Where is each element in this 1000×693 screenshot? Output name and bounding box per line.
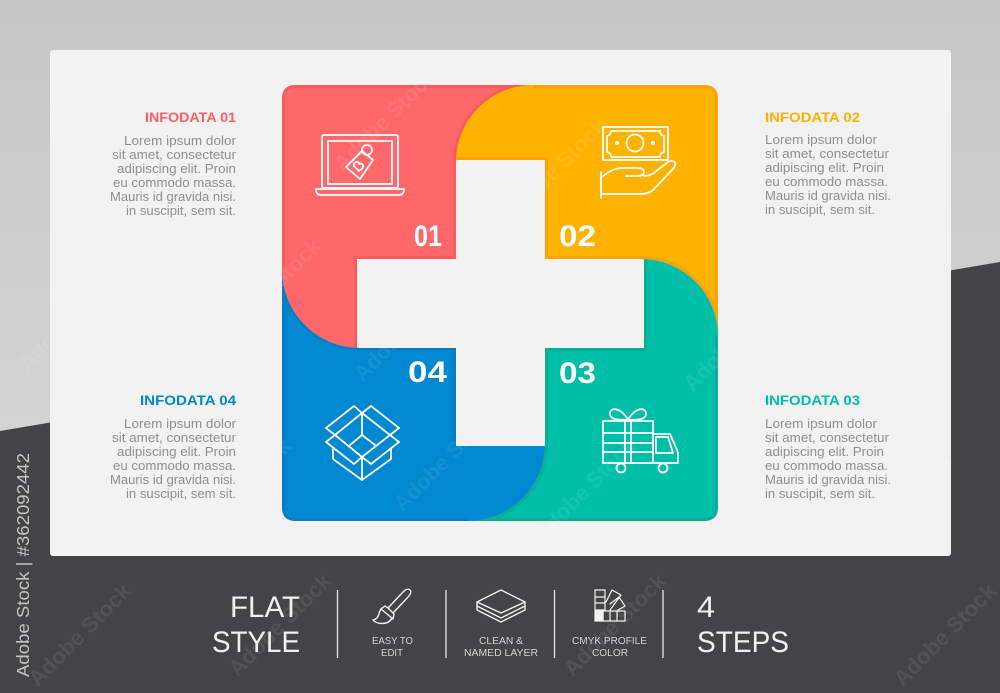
body 02: in suscipit, sem sit.	[765, 203, 875, 217]
icon: stacked layers	[477, 590, 525, 622]
faint diagonal stock marks: Adobe Stock	[13, 263, 127, 376]
faint diagonal stock marks: Adobe Stock	[388, 403, 502, 516]
body 04: adipiscing elit. Proin	[117, 445, 236, 459]
caption: clean and named layer: CLEAN &	[479, 636, 523, 647]
segment 03 teal	[468, 259, 718, 521]
vertical stock credit: Adobe Stock | #362092442	[13, 453, 33, 677]
body 03: sit amet, consectetur	[765, 431, 889, 445]
caption: cmyk profile color	[572, 636, 647, 659]
body 04: Lorem ipsum dolor	[124, 417, 236, 431]
body 01	[110, 134, 236, 218]
center plus shape	[357, 160, 644, 446]
caption: easy to edit: EDIT	[381, 648, 403, 659]
caption: easy to edit: EASY TO	[372, 636, 413, 647]
footer title: 4 steps: 4	[697, 591, 715, 624]
heading 04: INFODATA 04	[140, 392, 236, 408]
body 03: Lorem ipsum dolor	[765, 417, 877, 431]
number 01: 01	[414, 220, 442, 253]
body 03: eu commodo massa.	[765, 459, 888, 473]
body 01: adipiscing elit. Proin	[117, 162, 236, 176]
icon: delivery truck with gift	[603, 409, 678, 472]
text block: infodata 02	[765, 109, 891, 217]
icon: laptop with price tag	[316, 135, 404, 195]
faint diagonal stock marks: Adobe Stock	[328, 63, 442, 176]
body 03: Mauris id gravida nisi.	[765, 473, 891, 487]
footer strip	[212, 589, 789, 659]
body 02	[765, 133, 891, 217]
body 04	[110, 417, 236, 501]
main white panel	[50, 50, 951, 556]
faint diagonal stock marks: Adobe Stock	[223, 568, 337, 681]
icon: colour swatch fan	[595, 590, 625, 621]
faint diagonal stock marks: Adobe Stock	[48, 58, 162, 171]
text block: infodata 01	[110, 109, 236, 218]
body 02: Lorem ipsum dolor	[765, 133, 877, 147]
background: dark lower area	[0, 262, 1000, 693]
faint diagonal stock marks: Adobe Stock	[828, 113, 942, 226]
faint diagonal stock marks: Adobe Stock	[23, 578, 137, 691]
number 03: 03	[559, 357, 596, 390]
faint diagonal stock marks: Adobe Stock	[213, 233, 327, 346]
body 04: sit amet, consectetur	[112, 431, 236, 445]
faint diagonal stock marks: Adobe Stock	[183, 433, 297, 546]
faint diagonal stock marks: Adobe Stock	[498, 113, 612, 226]
caption: clean and named layer: NAMED LAYER	[464, 648, 538, 659]
caption: easy to edit	[372, 636, 413, 659]
body 04: Mauris id gravida nisi.	[110, 473, 236, 487]
footer title: 4 steps	[697, 591, 789, 659]
footer title: 4 steps: STEPS	[697, 626, 789, 659]
heading 03: INFODATA 03	[765, 392, 860, 408]
body 03	[765, 417, 891, 501]
faint diagonal stock marks: Adobe Stock	[843, 448, 957, 561]
cross diagram	[282, 85, 718, 521]
body 03: adipiscing elit. Proin	[765, 445, 884, 459]
faint diagonal stock marks: Adobe Stock	[888, 578, 1000, 691]
body 01: eu commodo massa.	[113, 176, 236, 190]
footer title: flat style	[212, 591, 300, 659]
footer title: flat style: STYLE	[212, 626, 300, 659]
faint diagonal stock marks: Adobe Stock	[678, 283, 792, 396]
text block: infodata 03	[765, 392, 891, 501]
footer title: flat style: FLAT	[230, 591, 300, 624]
body 02: eu commodo massa.	[765, 175, 888, 189]
body 03: in suscipit, sem sit.	[765, 487, 875, 501]
body 01: Lorem ipsum dolor	[124, 134, 236, 148]
caption: cmyk profile color: COLOR	[592, 648, 628, 659]
faint diagonal stock marks: Adobe Stock	[348, 273, 462, 386]
icon: open box	[326, 406, 399, 480]
text block: infodata 04	[110, 392, 236, 501]
caption: cmyk profile color: CMYK PROFILE	[572, 636, 647, 647]
footer dividers	[338, 590, 663, 658]
heading 02: INFODATA 02	[765, 109, 860, 125]
faint diagonal stock marks: Adobe Stock	[558, 568, 672, 681]
body 04: eu commodo massa.	[113, 459, 236, 473]
heading 01: INFODATA 01	[145, 109, 236, 125]
number 04: 04	[408, 356, 447, 389]
faint diagonal stock marks: Adobe Stock	[528, 433, 642, 546]
body 01: in suscipit, sem sit.	[126, 204, 236, 218]
icon: paint brush	[373, 589, 411, 624]
caption: clean and named layer	[464, 636, 538, 659]
body 01: sit amet, consectetur	[112, 148, 236, 162]
segment 02 yellow	[456, 85, 718, 336]
body 01: Mauris id gravida nisi.	[110, 190, 236, 204]
body 02: sit amet, consectetur	[765, 147, 889, 161]
body 04: in suscipit, sem sit.	[126, 487, 236, 501]
body 02: adipiscing elit. Proin	[765, 161, 884, 175]
segment 01 red	[282, 85, 533, 348]
segment 04 blue	[282, 270, 545, 521]
number 02: 02	[559, 220, 596, 253]
icon: hand holding money	[601, 127, 675, 198]
body 02: Mauris id gravida nisi.	[765, 189, 891, 203]
